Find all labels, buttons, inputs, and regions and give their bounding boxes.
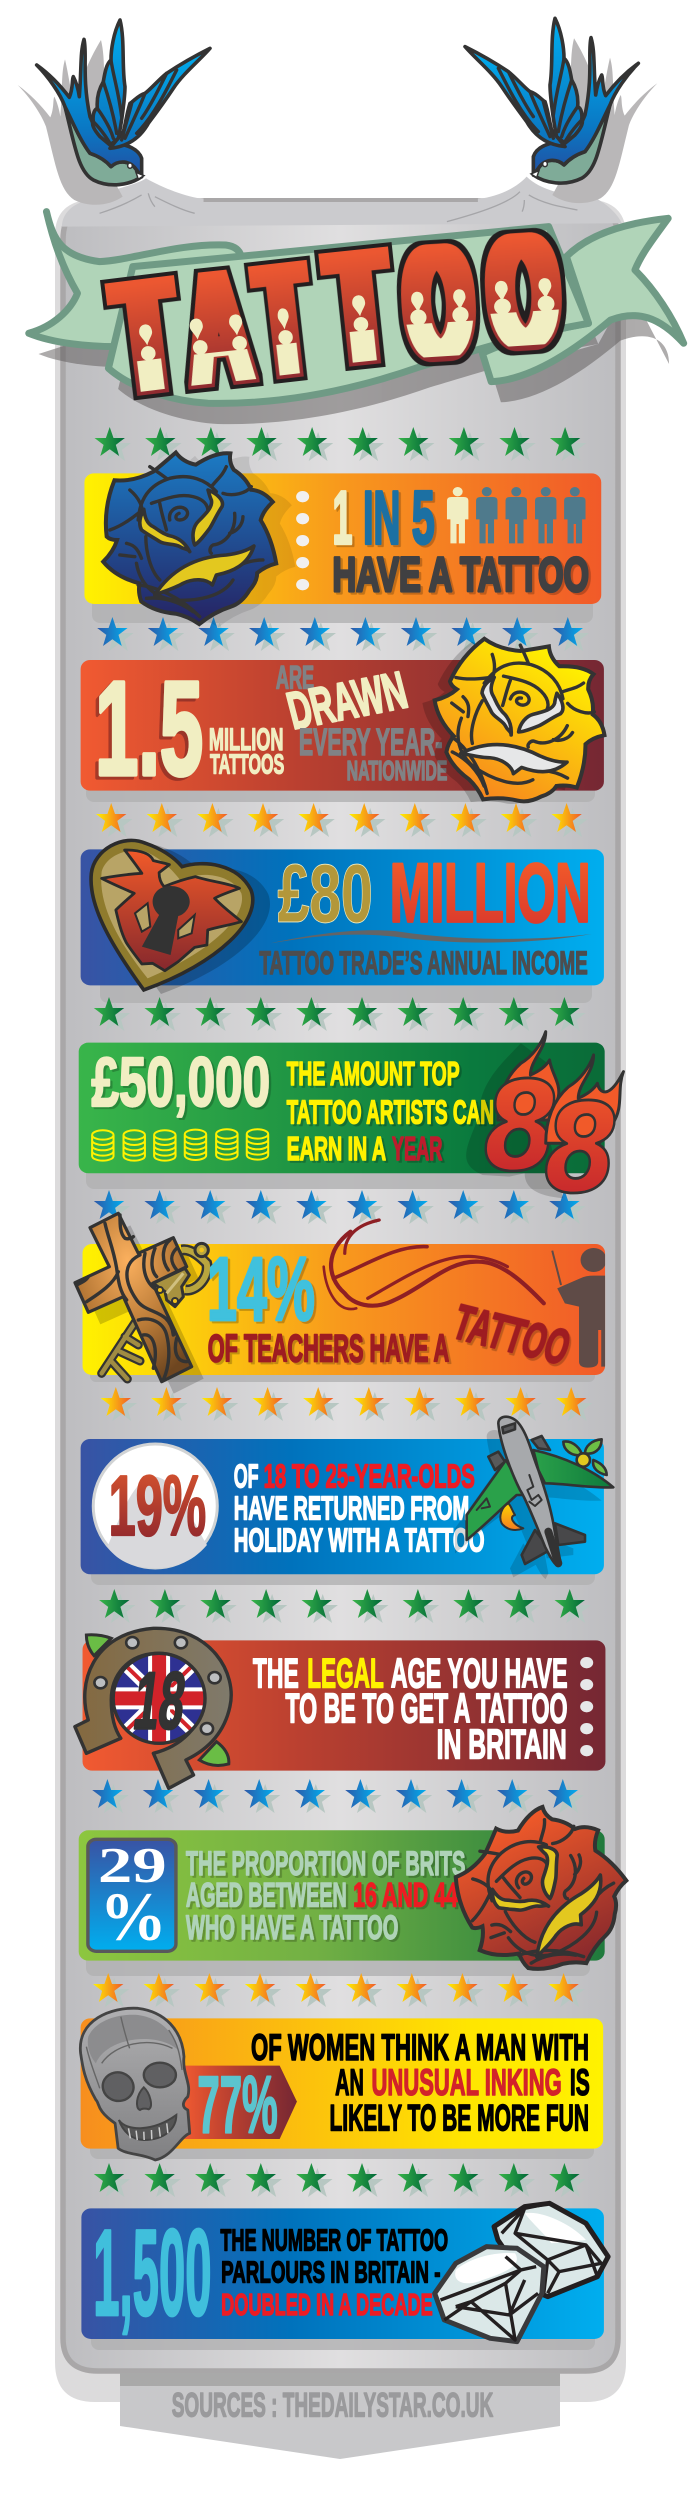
stat: 1 in 5 [333,476,435,560]
star row 6: orange [101,1387,592,1421]
icon: left swallow [18,20,210,205]
icon: plane [455,1417,613,1579]
icon: horseshoe [75,1628,231,1788]
title: TATTOO: T [324,216,394,401]
stat: 1 in 5: 1 [333,476,352,560]
title: TATTOO: O [485,201,562,384]
text: returned from holiday [234,1457,484,1559]
icon: five people [447,487,586,543]
panel: 77% of women: IS [570,2062,590,2103]
title: TATTOO: T [252,228,316,413]
cloth gathered at the top [62,177,622,227]
text: proportion of brits: AGED BETWEEN [186,1875,347,1914]
sign board background [55,200,626,2402]
icon: skull [80,2008,190,2160]
text: returned from holiday: HAVE RETURNED FROM [234,1489,469,1527]
text: proportion of brits: WHO HAVE A TATTOO [186,1907,398,1946]
icon: red swoosh [324,1220,544,1309]
text: proportion of brits: 16 AND 44 [353,1875,458,1914]
panel: 1.5 million tattoos [81,610,632,840]
stat: 14%: 14% [207,1238,315,1339]
text: legal age: LEGAL [307,1649,384,1697]
title: TATTOO: T [110,245,183,430]
star row 8: blue [92,1779,584,1813]
panel: £80 million [81,840,604,994]
icon: coin stacks [92,1129,268,1161]
text: tattoo: TATTOO [446,1296,577,1376]
text: million tattoos: TATTOOS [210,749,284,780]
stat: 1.5: 1.5 [95,655,203,803]
text: are drawn every year nationwide [276,660,447,786]
title: TATTOO: T [252,228,316,413]
panel: 14% of teachers [75,1213,609,1394]
stat: 19% badge: 19% [109,1458,206,1554]
dots [580,1657,593,1756]
title: TATTOO: T [110,245,183,430]
panel: 29% proportion [79,1787,651,2003]
panel: 1 in 5 have a tattoo: 5 [412,476,435,560]
dots [296,491,309,590]
title: TATTOO: O [402,212,476,395]
star row 5: blue [94,1190,586,1224]
icon: teacher [552,1248,609,1368]
title: TATTOO: T [110,245,183,430]
title: TATTOO: A [178,237,259,422]
stat: £50,000: £50,000 [91,1043,270,1121]
panel: 1,500 parlours [81,2203,608,2342]
text: number of parlours: THE NUMBER OF TATTOO [220,2223,448,2257]
star row 4: green [94,997,586,1031]
star row 10: green [94,2163,586,2197]
text group [81,1439,604,1574]
title: TATTOO: A [178,237,259,422]
text: legal age: THE [253,1649,299,1697]
star row 9: orange [93,1973,585,2007]
title: TATTOO: T [324,216,394,401]
icon: flaming 88: 8 [544,1078,618,1221]
stat: 1 in 5: IN [363,476,400,560]
panel: legal age [75,1628,605,1788]
panel background [83,1244,605,1375]
panel: 77% of women [80,2008,603,2160]
icon: heart locket [91,840,270,994]
star row 7: green [99,1589,591,1623]
decorative swoosh [270,930,592,943]
text: amount top artists earn: THE AMOUNT TOP [287,1054,460,1092]
text: amount top artists earn: EARN IN A [287,1129,386,1167]
badge: 29% [88,1837,176,1954]
stat: 19% badge [93,1444,217,1568]
text: women think: AN [335,2062,364,2103]
text: million tattoos [209,722,284,780]
title: TATTOO: O [402,212,476,395]
text: returned from holiday: OF [234,1457,259,1495]
text: legal age: IN BRITAIN [437,1720,567,1768]
title: TATTOO: O [485,201,562,384]
title: TATTOO: T [324,216,394,401]
title: TATTOO [100,228,567,400]
text: number of parlours: PARLOURS IN BRITAIN - [221,2255,440,2289]
title: TATTOO: O [402,212,476,395]
panel: 1 in 5 have a tattoo [84,453,601,627]
text: women think [251,2027,590,2139]
badge: 29%: 29 [98,1837,167,1893]
stat: £80: £80 [278,847,373,939]
icon: cross and key [75,1213,208,1394]
text: are drawn every year nationwide: EVERY YEAR- [299,721,442,763]
title: TATTOO: O [485,201,562,384]
icon: diamonds [435,2203,608,2342]
text: are drawn every year nationwide: DRAWN [281,660,413,740]
text: legal age [253,1649,568,1768]
icon: red rose [435,1787,651,2003]
text: proportion of brits [186,1843,465,1946]
panel: £50,000 [79,1032,623,1221]
icon: blue rose [103,453,295,627]
tag: 77%: 77% [197,2060,278,2150]
text group [207,1220,609,1376]
sources tab [120,2373,560,2459]
text: returned from holiday: 18 TO 25-YEAR-OLDS [264,1457,475,1495]
text: number of parlours: DOUBLED IN A DECADE [221,2287,433,2321]
title ribbon [29,212,684,424]
title: TATTOO: A [178,237,259,422]
text: are drawn every year nationwide: ARE [276,660,314,696]
text: amount top artists earn [287,1054,494,1167]
star row 1: green [94,427,586,461]
title: TATTOO: T [252,228,316,413]
tag: 77% [182,2060,297,2150]
text: number of parlours [220,2223,448,2321]
icon: right swallow [465,18,657,203]
star row 3: orange [96,803,588,837]
panel drop shadows [86,595,595,2350]
text: million tattoos: MILLION [209,722,284,757]
text: amount top artists earn: YEAR [392,1129,442,1167]
panel: 1,500 parlours: 1,500 [93,2204,212,2341]
icon: flaming 88 [466,1032,623,1221]
panel: 19% holiday [81,1417,613,1579]
badge: 29%: % [100,1878,167,1954]
panel: 1.5 million tattoos: NATIONWIDE [347,756,447,786]
icon: flaming 88: 8 [483,1056,558,1199]
icon: horseshoe: 18 [129,1655,190,1746]
icon: yellow rose [391,610,632,840]
star row 2: blue [97,617,589,651]
